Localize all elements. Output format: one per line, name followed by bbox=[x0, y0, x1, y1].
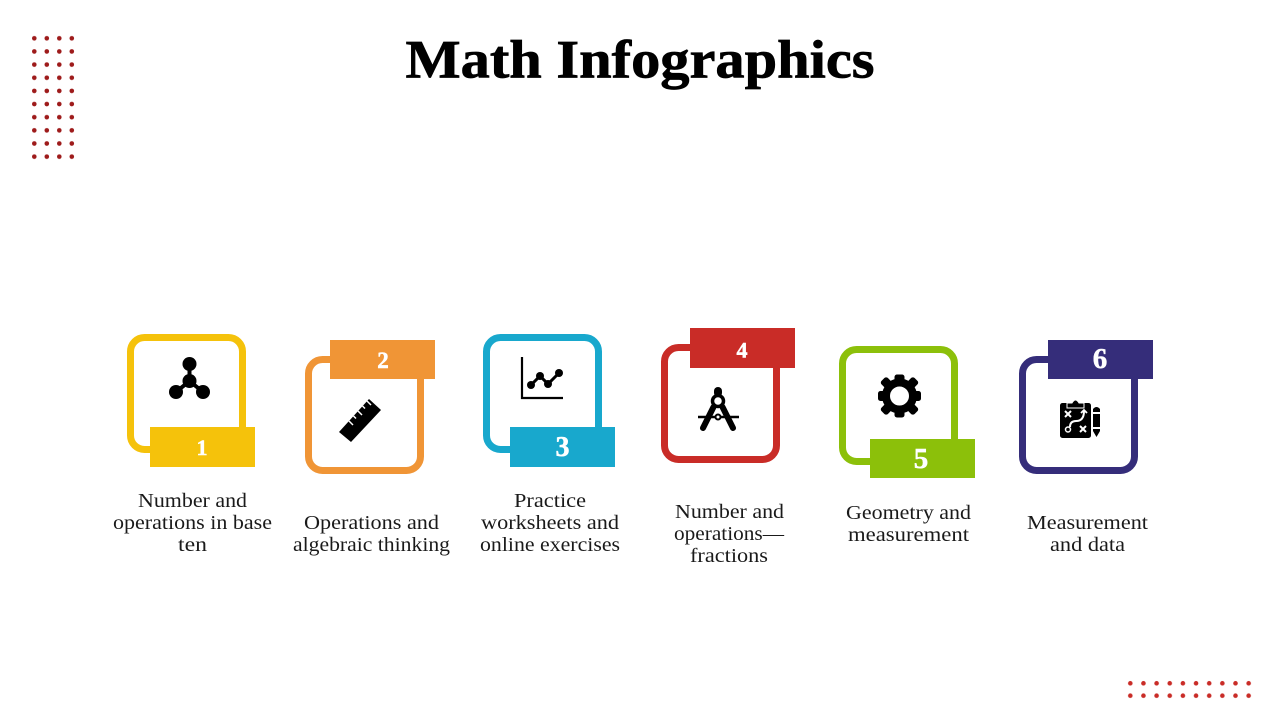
card 1 label: ten bbox=[178, 534, 207, 556]
card 4: number and operations fractions bbox=[664, 328, 795, 567]
card 4 label: Number and bbox=[675, 501, 784, 523]
card 4 label: operations— bbox=[674, 523, 785, 545]
card 5 label: Geometry and bbox=[846, 502, 971, 524]
card 2 label: algebraic thinking bbox=[293, 534, 450, 556]
card 5 frame bbox=[842, 350, 954, 462]
decorative dot grid: bottom right bbox=[1124, 677, 1256, 702]
card 2: operations and algebraic thinking bbox=[293, 340, 450, 556]
card 2 frame bbox=[308, 360, 420, 470]
card 1 number tag: 1 bbox=[196, 435, 208, 460]
card 2 label: Operations and bbox=[304, 512, 439, 534]
card 4 number tag bbox=[690, 328, 795, 368]
card 5 number tag bbox=[870, 439, 975, 478]
card 3 number tag: 3 bbox=[556, 432, 570, 463]
card 1 label: operations in base bbox=[113, 512, 272, 534]
card 3: practice worksheets and online exercises bbox=[480, 338, 620, 556]
decorative dot grid: top left bbox=[28, 32, 78, 164]
card 4 number tag: 4 bbox=[736, 338, 748, 362]
card 5: geometry and measurement bbox=[842, 350, 975, 546]
card 2 number tag bbox=[330, 340, 435, 379]
card 3 label: Practice bbox=[514, 490, 586, 512]
title: Math Infographics bbox=[406, 30, 874, 90]
card 5 label: measurement bbox=[848, 524, 969, 546]
card 1 frame bbox=[130, 338, 242, 450]
card 1 number tag bbox=[150, 427, 255, 467]
card 6: measurement and data bbox=[1022, 340, 1153, 556]
card 6 number tag bbox=[1048, 340, 1153, 379]
card 1: number and operations in base ten bbox=[113, 338, 272, 556]
card 4 label: fractions bbox=[690, 545, 768, 567]
card 4 frame bbox=[664, 348, 776, 460]
card 3 number tag bbox=[510, 427, 615, 467]
card 6 frame bbox=[1022, 360, 1134, 470]
icon: ruler bbox=[339, 399, 381, 442]
icon: clipboard plan with pencil bbox=[1060, 400, 1100, 438]
card 1 label: Number and bbox=[138, 490, 247, 512]
icon: molecule nodes bbox=[169, 357, 210, 399]
card 3 frame bbox=[486, 338, 598, 450]
icon: gear bbox=[878, 374, 921, 418]
card 2 number tag: 2 bbox=[377, 348, 389, 373]
card 3 label: worksheets and bbox=[481, 512, 619, 534]
icon: line chart bbox=[522, 357, 563, 398]
card 6 label: Measurement bbox=[1027, 512, 1148, 534]
card 3 label: online exercises bbox=[480, 534, 620, 556]
card 6 label: and data bbox=[1050, 534, 1125, 556]
card 6 number tag: 6 bbox=[1093, 343, 1107, 375]
icon: drawing compass bbox=[698, 391, 739, 428]
card 5 number tag: 5 bbox=[914, 443, 928, 475]
